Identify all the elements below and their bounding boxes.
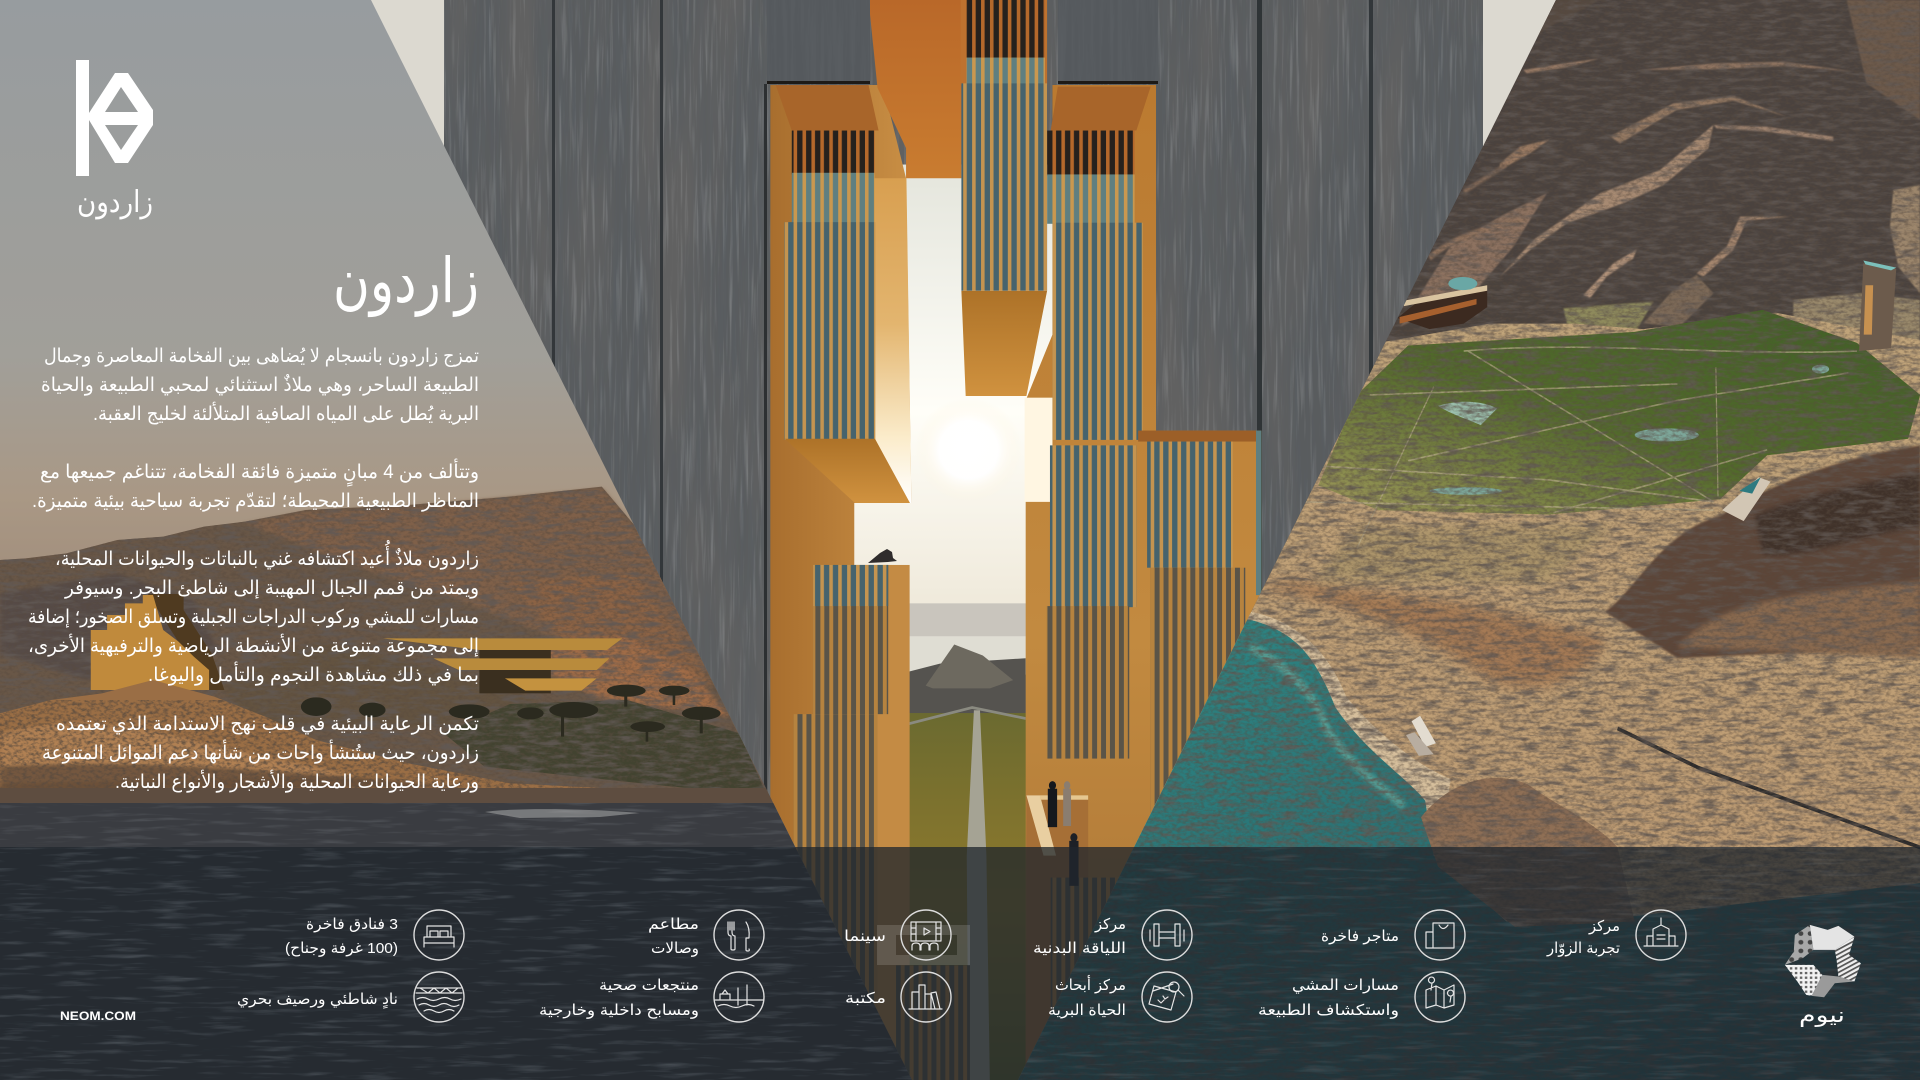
amenity: spas and pools: ومسابح داخلية وخارجية bbox=[539, 1002, 699, 1019]
panel: timber structure bbox=[770, 0, 1261, 1080]
amenity: library: مكتبة bbox=[845, 990, 886, 1007]
balcony with visitors bbox=[1026, 781, 1169, 1080]
amenity: wildlife research centre bbox=[1048, 972, 1192, 1022]
foreground dunes bbox=[0, 680, 598, 788]
panel: central sunlit opening and landscape bbox=[847, 165, 1061, 1080]
amenity: cinema: سينما bbox=[844, 928, 886, 945]
amenity: hotels bbox=[285, 910, 464, 960]
amenity: wildlife research centre: مركز أبحاث bbox=[1055, 975, 1126, 994]
sun glow bbox=[915, 398, 1022, 502]
amenity: beach club and marina: نادٍ شاطئي ورصيف بحري bbox=[237, 991, 398, 1009]
amenity: hotels: 3 فنادق فاخرة bbox=[306, 916, 398, 933]
amenity: spas and pools bbox=[539, 972, 764, 1022]
text block: four buildings paragraph bbox=[32, 458, 479, 512]
mountain ridges bbox=[1400, 0, 1920, 360]
panel: left coastal photo bbox=[0, 0, 920, 1080]
title: زاردون bbox=[333, 247, 479, 317]
left flank lit ridges bbox=[1428, 163, 1507, 261]
amenity: trails and nature exploration: واستكشاف الطبيعة bbox=[1258, 1002, 1399, 1019]
bottom translucent band bbox=[0, 847, 1920, 1080]
text block: intro paragraph: البرية يُطل على المياه الصافية المتلألئة لخليج العقبة. bbox=[93, 402, 479, 425]
amenity: restaurants: مطاعم bbox=[648, 916, 699, 933]
text block: sanctuary paragraph: بما في ذلك مشاهدة النجوم والتأمل واليوغا. bbox=[148, 661, 479, 686]
site plain and sand bbox=[1154, 312, 1920, 914]
monolith tower bbox=[1859, 261, 1896, 351]
text block: sanctuary paragraph: مسارات للمشي وركوب الدراجات الجبلية وتسلق الصخور؛ إضافة bbox=[28, 607, 479, 629]
concrete top blocks bbox=[767, 0, 1158, 84]
panel: concrete tower columns bbox=[444, 0, 1483, 1080]
mountain texture bbox=[2, 490, 758, 788]
text block: intro paragraph bbox=[41, 346, 479, 425]
text block: sustainability paragraph: زاردون، حيث ستُنشأ واحات من شأنها دعم الموائل المتنوعة bbox=[42, 739, 479, 764]
panel: right aerial site photo bbox=[994, 0, 1920, 1080]
logo wordmark: زاردون bbox=[77, 186, 153, 220]
figure on left balcony bbox=[868, 549, 897, 563]
text block: sanctuary paragraph bbox=[28, 541, 479, 686]
text block: sanctuary paragraph: زاردون ملاذٌ أُعيد اكتشافه غني بالنباتات والحيوانات المحلية، bbox=[55, 541, 479, 570]
amenity: luxury shops bbox=[1321, 910, 1465, 960]
gold stepped building bbox=[91, 594, 224, 690]
amenity: wildlife research centre: الحياة البرية bbox=[1048, 1002, 1126, 1019]
coastal rock bbox=[1421, 778, 1635, 927]
amenity: cinema bbox=[844, 910, 951, 960]
access road bbox=[1618, 728, 1920, 847]
lower-left timber boxes bbox=[794, 565, 970, 1080]
amenity: visitor experience centre: مركز bbox=[1588, 918, 1620, 935]
beach pavilion bbox=[1406, 716, 1436, 756]
amenity: restaurants bbox=[648, 910, 764, 960]
amenity: fitness centre: اللياقة البدنية bbox=[1033, 940, 1126, 957]
acacia trees bbox=[301, 685, 721, 742]
amenity: spas and pools: منتجعات صحية bbox=[599, 977, 699, 994]
gold terraced building bbox=[382, 638, 622, 693]
amenity: beach club and marina bbox=[237, 972, 464, 1022]
amenity: visitor experience centre bbox=[1546, 910, 1686, 960]
amenity: luxury shops: متاجر فاخرة bbox=[1321, 928, 1399, 945]
lower-right brown mountain bbox=[1605, 445, 1920, 658]
hotel on left slope bbox=[1397, 277, 1487, 329]
text block: sustainability paragraph: تكمن الرعاية البيئية في قلب نهج الاستدامة الذي تعتمده bbox=[56, 714, 479, 735]
text block: four buildings paragraph: وتتألف من 4 مبانٍ متميزة فائقة الفخامة، تتناغم جميعها مع bbox=[40, 458, 479, 487]
sea and beach bbox=[994, 612, 1920, 1080]
amenity: trails and nature exploration: مسارات المشي bbox=[1292, 977, 1399, 995]
texture overlay bbox=[1018, 0, 1920, 1080]
amenity: hotels: (100 غرفة وجناح) bbox=[285, 940, 398, 957]
green oasis bbox=[1306, 310, 1920, 549]
amenity: trails and nature exploration bbox=[1258, 972, 1465, 1022]
text block: sustainability paragraph: ورعاية الحيوانات المحلية والأشجار والأنواع النباتية. bbox=[115, 770, 479, 793]
amenity: restaurants: وصالات bbox=[651, 940, 699, 957]
amenity: fitness centre: مركز bbox=[1094, 916, 1126, 933]
terraced hotel bbox=[1722, 477, 1771, 521]
text block: sanctuary paragraph: إلى مجموعة متنوعة من الأنشطة الرياضية والترفيهية الأخرى، bbox=[28, 634, 479, 658]
text block: sanctuary paragraph: ويمتد من قمم الجبال المهيبة إلى شاطئ البحر. وسيوفر bbox=[64, 578, 479, 600]
NEOM website: NEOM.COM bbox=[60, 1009, 136, 1023]
text block: four buildings paragraph: المناظر الطبيعية المحيطة؛ لتقدّم تجربة سياحية بيئية متميزة. bbox=[32, 491, 479, 512]
logo: Zardun mark bbox=[76, 60, 153, 220]
text block: intro paragraph: الطبيعة الساحر، وهي ملاذٌ استثنائي لمحبي الطبيعة والحياة bbox=[41, 375, 479, 396]
text block: intro paragraph: تمزج زاردون بانسجام لا يُضاهى بين الفخامة المعاصرة وجمال bbox=[44, 346, 479, 367]
amenity: visitor experience centre: تجربة الزوّار bbox=[1546, 940, 1620, 957]
text block: sustainability paragraph bbox=[42, 714, 479, 793]
logo wordmark: نيوم bbox=[1799, 1004, 1845, 1027]
amenity: fitness centre bbox=[1033, 910, 1192, 960]
logo: NEOM star bbox=[1785, 925, 1861, 1027]
amenity: library bbox=[845, 972, 951, 1022]
